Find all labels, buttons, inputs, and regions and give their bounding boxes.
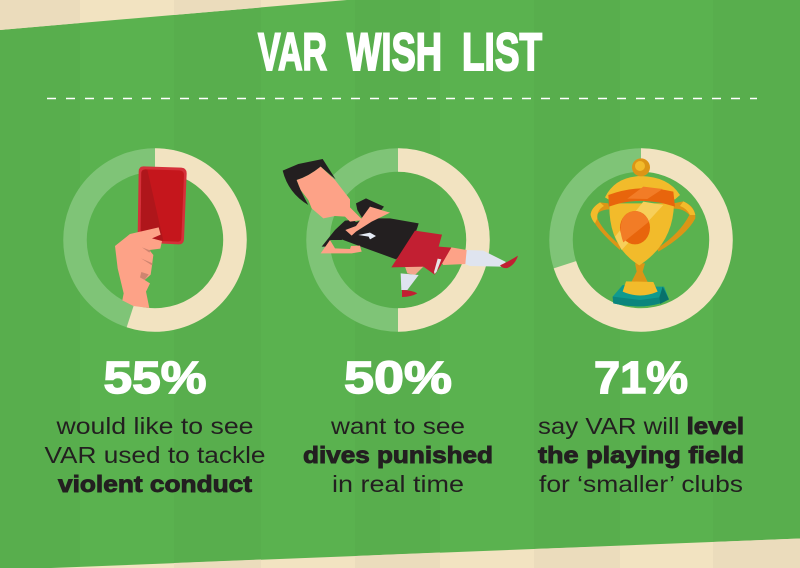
text: would like to see VAR used to tackle violent conduct: VAR used to tackle — [44, 442, 266, 468]
text: would like to see VAR used to tackle violent conduct: violent conduct — [58, 471, 252, 497]
percentage: 55%: 55% — [104, 352, 206, 403]
percentage: 50%: 50% — [344, 352, 452, 403]
dashed divider — [47, 98, 757, 100]
title: WISH — [347, 23, 442, 82]
text: say VAR will level the playing field for smaller clubs: the playing field — [538, 442, 744, 468]
icon: diving footballer — [283, 159, 518, 297]
ring chart: 50% — [318, 160, 478, 320]
title: LIST — [462, 23, 542, 82]
top beige wedge — [0, 0, 347, 30]
panel: 50% dives punished — [283, 159, 518, 497]
text: want to see dives punished in real time: dives punished — [303, 442, 493, 468]
text: say VAR will level the playing field for smaller clubs: say VAR will level — [538, 413, 744, 439]
title — [258, 23, 542, 82]
ring chart: 71% — [561, 160, 721, 320]
text: would like to see VAR used to tackle violent conduct — [44, 413, 266, 497]
text: would like to see VAR used to tackle violent conduct: would like to see — [55, 413, 254, 439]
ring chart: 55% — [75, 160, 235, 320]
icon: hand holding red card — [115, 166, 187, 308]
text: want to see dives punished in real time — [303, 413, 493, 497]
title: VAR — [258, 23, 327, 82]
icon: gold trophy — [591, 158, 695, 306]
text: say VAR will level the playing field for smaller clubs: for ‘smaller’ clubs — [539, 471, 743, 497]
text: want to see dives punished in real time: want to see — [330, 413, 465, 439]
panel: 55% violent conduct — [44, 160, 266, 497]
text: say VAR will level the playing field for smaller clubs — [538, 413, 744, 497]
text: want to see dives punished in real time: in real time — [332, 471, 464, 497]
panel: 71% level the playing field — [538, 158, 744, 497]
bottom beige wedge — [51, 538, 800, 568]
percentage: 71%: 71% — [594, 352, 688, 403]
